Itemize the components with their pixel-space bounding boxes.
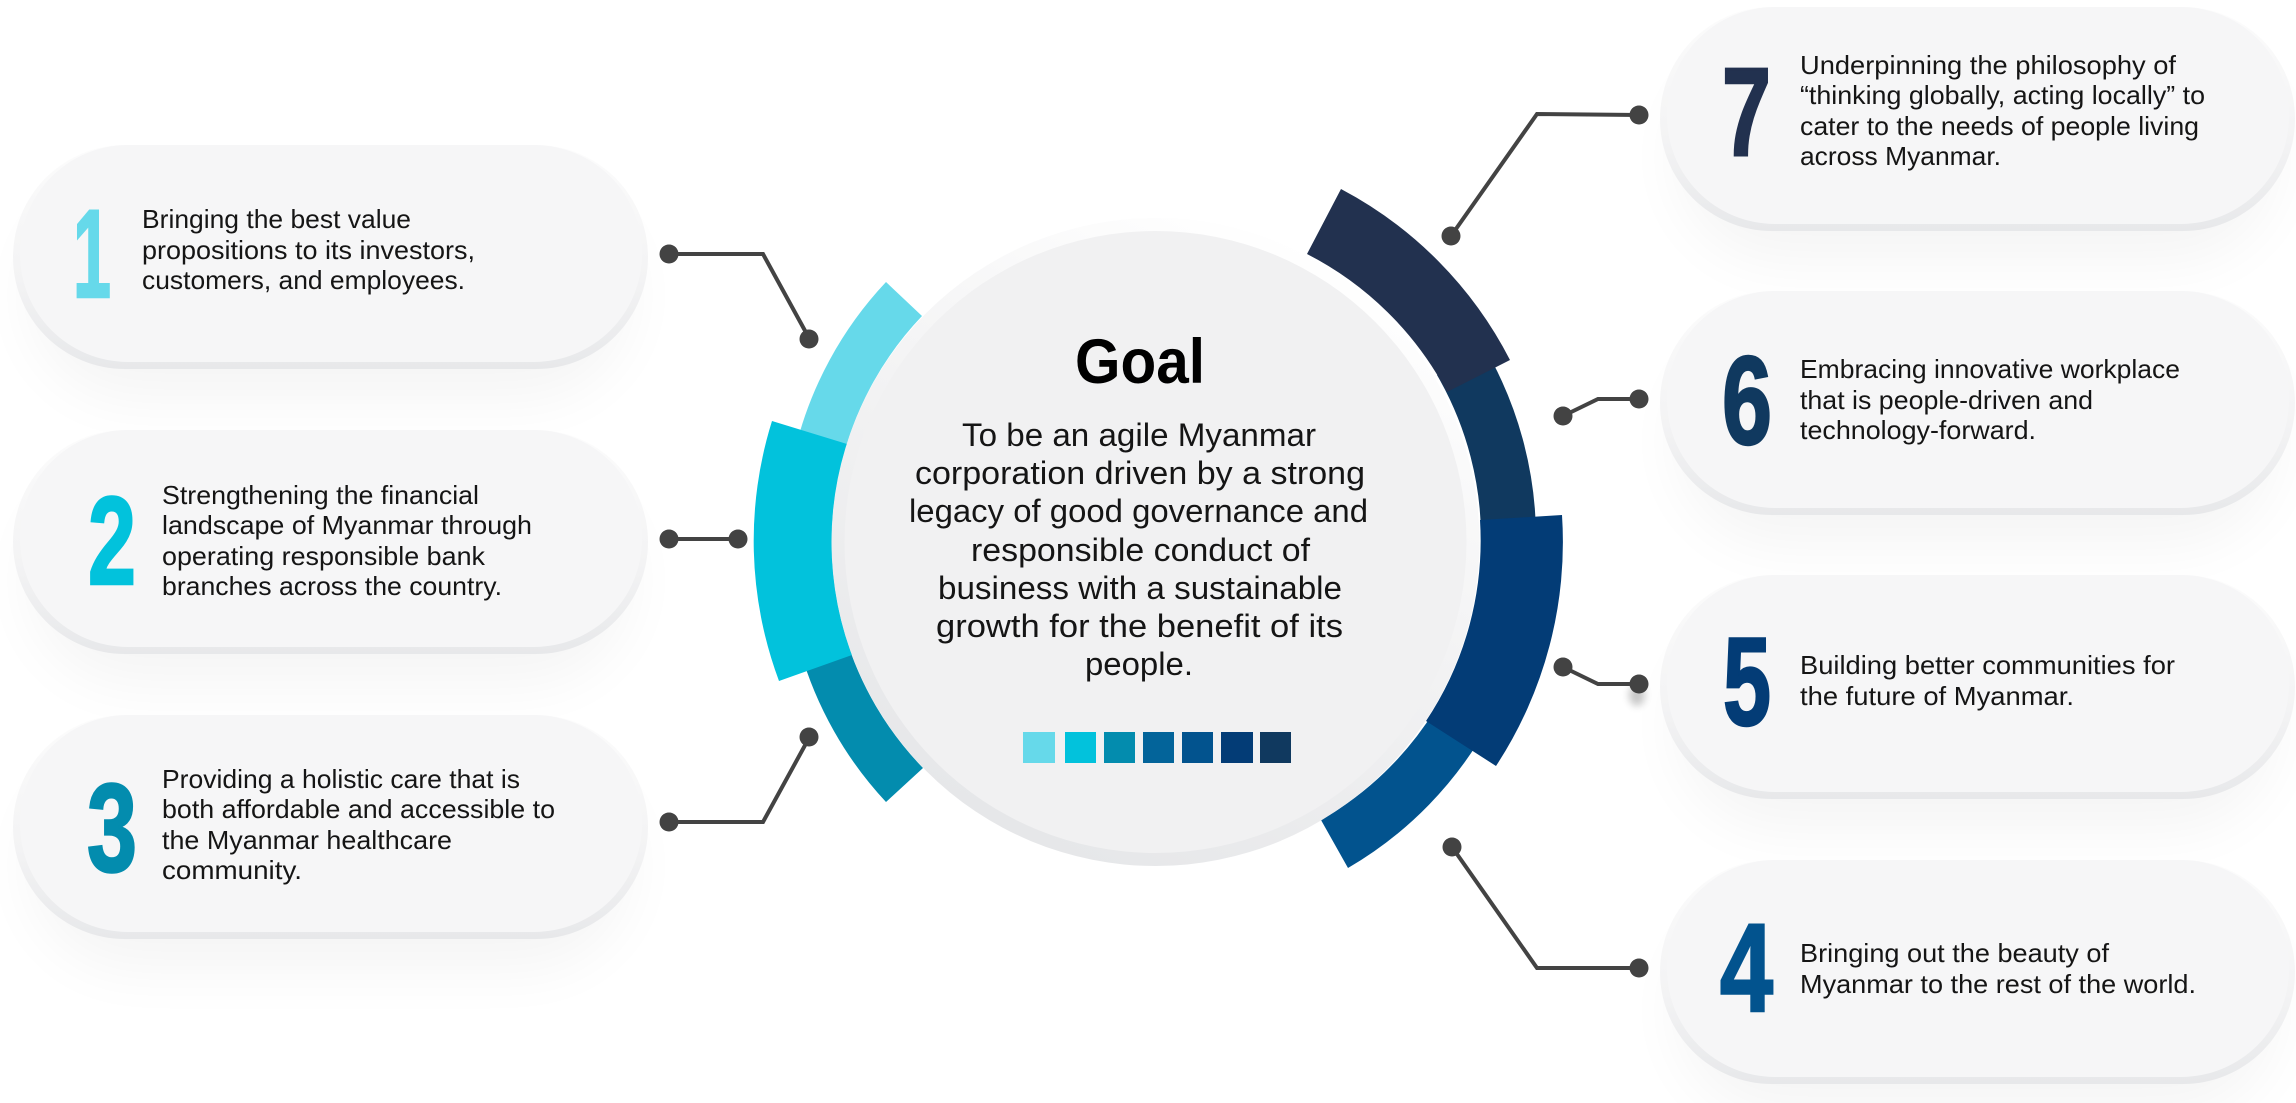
central circle (832, 218, 1480, 866)
goal description: To be an agile Myanmar (962, 417, 1316, 453)
goal description: responsible conduct of (971, 532, 1310, 568)
goal description: legacy of good governance and (909, 493, 1368, 529)
text: pill 6: that is people-driven and (1800, 385, 2093, 415)
text: pill 5 (1800, 650, 2175, 711)
text: pill 5: the future of Myanmar. (1800, 681, 2074, 711)
text: pill 7: cater to the needs of people living (1800, 111, 2199, 141)
arc segment 3 (800, 635, 923, 802)
number 5: 5 (1723, 613, 1771, 752)
text: pill 1: Bringing the best value (142, 204, 411, 234)
arc segment 7 (1307, 189, 1510, 392)
connector 1 (660, 244, 818, 348)
ring: coloured arc segments (754, 189, 1563, 868)
text: pill 3: both affordable and accessible to (162, 794, 555, 824)
panel: pill 4 (1660, 860, 2295, 1103)
text: pill 3 (162, 764, 555, 885)
text: pill 3: Providing a holistic care that is (162, 764, 520, 794)
text: pill 2: branches across the country. (162, 571, 502, 601)
arc segment 6 (1437, 340, 1536, 545)
text: pill 2: landscape of Myanmar through (162, 510, 532, 540)
arc segment 5 (1426, 515, 1563, 766)
text: pill 7 (1800, 50, 2205, 171)
panel: pill 6 (1660, 291, 2295, 546)
legend: colour squares (1023, 732, 1291, 763)
goal description: growth for the benefit of its (936, 608, 1343, 644)
goal description: corporation driven by a strong (915, 455, 1365, 491)
goal description: business with a sustainable (938, 570, 1342, 606)
text: pill 3: the Myanmar healthcare (162, 825, 452, 855)
text: pill 4: Bringing out the beauty of (1800, 938, 2110, 968)
connector 5 (1554, 658, 1648, 706)
text: pill 1: customers, and employees. (142, 265, 465, 295)
arc segment 1 (795, 282, 922, 470)
number 1: 1 (73, 185, 111, 324)
text: pill 7: Underpinning the philosophy of (1800, 50, 2177, 80)
connector 3 (660, 728, 818, 832)
text: pill 7: “thinking globally, acting locally” to (1800, 80, 2205, 110)
text: pill 6: technology-forward. (1800, 415, 2036, 445)
text: pill 7: across Myanmar. (1800, 141, 2001, 171)
arc segment 2 (754, 421, 852, 681)
goal description (909, 417, 1368, 682)
arc segment 4 (1321, 710, 1490, 868)
text: pill 5: Building better communities for (1800, 650, 2175, 680)
text: pill 1 (142, 204, 475, 295)
text: pill 2 (162, 480, 532, 601)
panel: pill 5 (1660, 575, 2295, 830)
connector 2 (660, 530, 748, 548)
connector 7 (1442, 106, 1648, 246)
connector 4 (1442, 838, 1648, 978)
number 4: 4 (1720, 899, 1773, 1038)
number 7: 7 (1722, 43, 1771, 182)
number 3: 3 (87, 759, 137, 898)
text: pill 3: community. (162, 855, 302, 885)
panel: pill 3 (13, 715, 648, 970)
number 2: 2 (88, 472, 136, 611)
text: pill 2: Strengthening the financial (162, 480, 479, 510)
goal description: people. (1085, 646, 1193, 682)
connector 6 (1554, 390, 1648, 426)
text: pill 1: propositions to its investors, (142, 235, 475, 265)
text: pill 2: operating responsible bank (162, 541, 486, 571)
number 6: 6 (1722, 332, 1772, 471)
heading: Goal: Goal (1075, 327, 1205, 397)
text: pill 6 (1800, 354, 2180, 445)
text: pill 4: Myanmar to the rest of the world. (1800, 969, 2196, 999)
text: pill 4 (1800, 938, 2196, 999)
panel: pill 1 (13, 145, 648, 400)
panel: pill 7 (1660, 7, 2295, 262)
panel: pill 2 (13, 430, 648, 685)
text: pill 6: Embracing innovative workplace (1800, 354, 2180, 384)
